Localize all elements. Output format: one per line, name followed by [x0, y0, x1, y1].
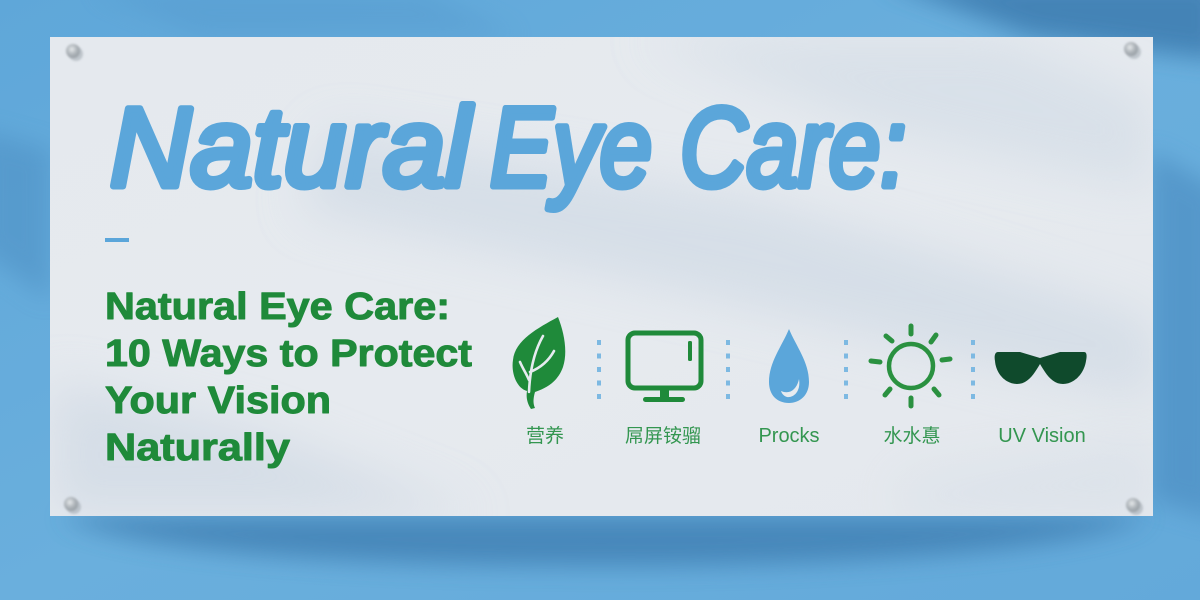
icon: sun — [871, 326, 950, 406]
subtitle — [105, 286, 472, 469]
subtitle: Natural Eye Care: — [105, 286, 450, 328]
subtitle: 10 Ways to Protect — [105, 333, 472, 375]
icon labels: Procks — [758, 425, 820, 447]
subtitle: Your Vision — [105, 380, 331, 422]
icon labels — [526, 425, 1086, 447]
title: Natural — [110, 85, 473, 210]
icon labels: 营养 — [526, 425, 564, 447]
icon: leaf — [513, 317, 565, 409]
title: Care: — [680, 85, 906, 210]
corner screws — [64, 42, 1143, 515]
panel drop shadow — [60, 516, 1150, 566]
icon labels: UV Vision — [998, 425, 1086, 447]
white sign panel — [50, 37, 1153, 516]
divider — [726, 340, 730, 400]
icon labels: 屌屏铵骝 — [625, 425, 701, 447]
icon: water drop — [769, 329, 809, 403]
icon labels: 水水惪 — [883, 425, 941, 447]
icon: monitor — [628, 333, 701, 402]
title: Eye — [490, 85, 652, 210]
icon: sunglasses — [995, 352, 1087, 384]
divider — [597, 340, 601, 400]
subtitle: Naturally — [105, 427, 290, 469]
divider — [971, 340, 975, 400]
accent dash — [105, 238, 129, 242]
divider — [844, 340, 848, 400]
